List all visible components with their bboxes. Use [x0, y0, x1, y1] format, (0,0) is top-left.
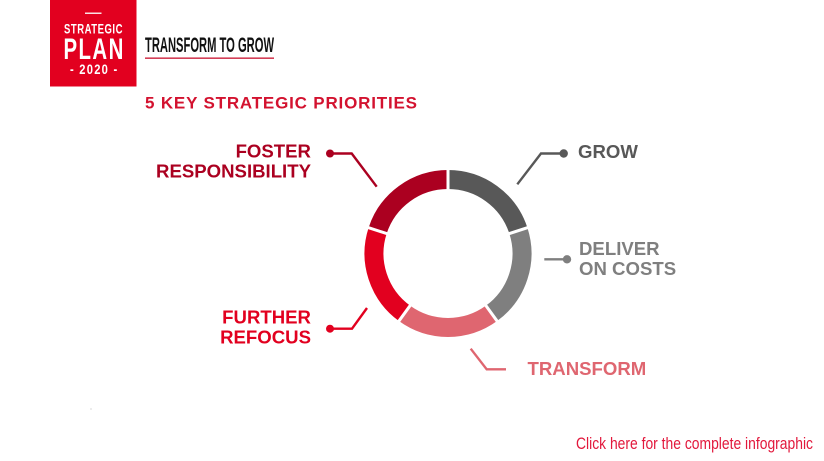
label: foster responsibility: RESPONSIBILITY	[156, 160, 312, 182]
label: transform: TRANSFORM	[528, 358, 646, 379]
connector: foster responsibility	[326, 150, 377, 187]
label: deliver on costs: ON COSTS	[579, 258, 676, 279]
label: foster responsibility: FOSTER	[236, 140, 312, 161]
segment: transform	[404, 313, 492, 328]
header: Transform to Grow	[145, 34, 274, 59]
segment: deliver on costs	[492, 231, 522, 313]
header: Transform to Grow: TRANSFORM TO GROW	[145, 34, 274, 57]
segment: grow	[448, 180, 518, 231]
title: 5 KEY STRATEGIC PRIORITIES	[145, 94, 417, 112]
donut chart	[364, 166, 532, 328]
logo: Strategic Plan 2020	[50, 0, 136, 86]
logo: Strategic Plan 2020: PLAN	[64, 33, 123, 66]
segment: foster responsibility	[378, 180, 448, 231]
segment: further refocus	[374, 231, 404, 313]
connector: grow	[517, 149, 568, 184]
connector: further refocus	[326, 308, 367, 333]
label: deliver on costs: DELIVER	[579, 238, 660, 259]
label: further refocus: FURTHER	[222, 306, 312, 328]
logo: Strategic Plan 2020: STRATEGIC	[64, 20, 123, 37]
connector: deliver on costs	[544, 255, 571, 264]
logo: Strategic Plan 2020: - 2020 -	[70, 62, 117, 77]
connector: transform	[471, 349, 506, 369]
label: further refocus: REFOCUS	[220, 326, 311, 348]
label: grow: GROW	[578, 141, 638, 162]
